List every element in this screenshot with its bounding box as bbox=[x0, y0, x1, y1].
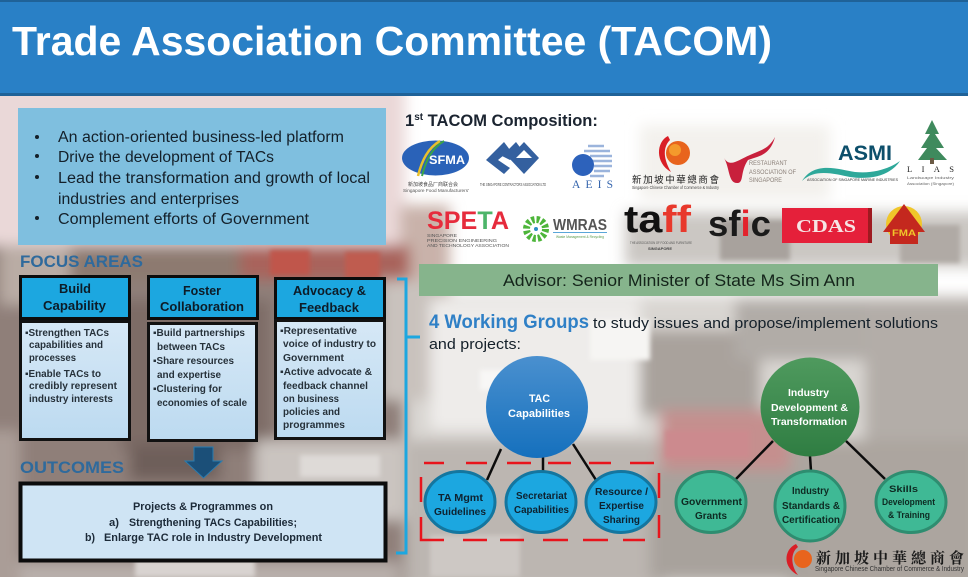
panel: advocacy and feedback: policies and bbox=[283, 407, 340, 418]
panel: build capability: Build bbox=[59, 281, 91, 296]
logo: LIAS bbox=[907, 120, 955, 186]
logo: CDAS: CDAS bbox=[796, 216, 856, 236]
node: skills development and training: Skills bbox=[889, 484, 918, 494]
panel: outcomes: Enlarge TAC role in Industry Development bbox=[104, 532, 322, 544]
text: working groups intro: to study issues and propose/implement solutions bbox=[593, 315, 938, 332]
title banner: Trade Association Committee (TACOM) bbox=[12, 18, 772, 64]
logo: chamber footer bbox=[786, 544, 964, 575]
node: government grants bbox=[676, 472, 746, 532]
panel: advocacy and feedback: voice of industry to bbox=[283, 339, 376, 350]
panel: outcomes: Strengthening TACs Capabilities; bbox=[129, 517, 297, 529]
node: industry development and transformation: Development & bbox=[771, 403, 848, 414]
node: TA management guidelines: TA Mgmt bbox=[438, 493, 484, 504]
panel: advocacy and feedback bbox=[276, 278, 384, 438]
panel: foster collaboration: ▪Build partnerships bbox=[153, 328, 245, 339]
node: secretariat capabilities: Capabilities bbox=[514, 505, 569, 516]
logo: chamber footer: 新加坡中華總商會 bbox=[816, 549, 964, 567]
panel: TACOM description: Drive the development of TACs bbox=[58, 149, 274, 166]
panel: foster collaboration: and expertise bbox=[157, 370, 221, 381]
panel: foster collaboration bbox=[148, 276, 258, 440]
panel: TACOM description: An action-oriented business-led platform bbox=[58, 129, 344, 146]
heading: composition: st bbox=[414, 112, 424, 123]
logo: contractors association bbox=[480, 142, 546, 187]
text: working groups intro bbox=[429, 312, 938, 353]
panel: build capability: industry interests bbox=[29, 394, 113, 405]
panel: build capability: Capability bbox=[43, 298, 107, 313]
logo: sfic: sfic bbox=[708, 203, 771, 244]
panel: foster collaboration: ▪Share resources bbox=[153, 356, 234, 367]
text: working groups intro: and projects: bbox=[429, 336, 521, 353]
node: government grants: Government bbox=[681, 497, 743, 508]
node: industry standards and certification: Standards & bbox=[782, 501, 840, 512]
panel: advocacy and feedback: feedback channel bbox=[283, 381, 368, 392]
logos: member associations bbox=[402, 120, 955, 251]
node: skills development and training: Development bbox=[882, 497, 935, 507]
panel: outcomes: Projects & Programmes on bbox=[133, 501, 273, 513]
node: secretariat capabilities: Secretariat bbox=[516, 491, 568, 502]
node: TAC capabilities: TAC bbox=[529, 393, 550, 405]
advisor bar: Advisor: Senior Minister of State Ms Sim Ann bbox=[503, 272, 855, 290]
panel: build capability: credibly represent bbox=[29, 381, 118, 392]
chart: TAC capabilities working group bbox=[421, 356, 659, 540]
logo: AEIS: AEIS bbox=[572, 179, 613, 191]
heading: outcomes: OUTCOMES bbox=[20, 458, 124, 477]
logo: SPETA: SPETA bbox=[427, 207, 509, 235]
panel: foster collaboration: Collaboration bbox=[160, 299, 244, 314]
logo: Singapore Chinese Chamber: 新加坡中華總商會 bbox=[632, 174, 719, 186]
title banner bbox=[0, 0, 968, 96]
node: TA management guidelines: Guidelines bbox=[434, 507, 486, 518]
panel: build capability: ▪Enable TACs to bbox=[25, 369, 101, 380]
panel: advocacy and feedback: Advocacy & bbox=[293, 283, 366, 298]
red dashed highlight bbox=[421, 463, 659, 540]
node: TAC capabilities: Capabilities bbox=[508, 408, 570, 420]
node: secretariat capabilities bbox=[506, 472, 576, 532]
text: working groups intro: 4 Working Groups bbox=[429, 312, 589, 333]
panel: outcomes: b) bbox=[85, 532, 95, 544]
panel: foster collaboration: ▪Clustering for bbox=[153, 384, 222, 395]
chart: industry development working group bbox=[676, 358, 946, 541]
heading: focus areas: FOCUS AREAS bbox=[20, 252, 143, 271]
panel: build capability: capabilities and bbox=[29, 340, 103, 351]
panel: outcomes bbox=[20, 484, 386, 560]
logo: WMRAS bbox=[526, 217, 607, 239]
logo: Restaurant Association: RESTAURANT bbox=[749, 160, 787, 167]
logo: LIAS: Association (Singapore) bbox=[907, 182, 955, 186]
logo: Singapore Chinese Chamber: Singapore Chinese Chamber of Commerce & Industry bbox=[632, 185, 720, 190]
panel: advocacy and feedback: ▪Representative bbox=[280, 326, 357, 337]
node: government grants: Grants bbox=[695, 511, 727, 522]
panel: advocacy and feedback: Feedback bbox=[299, 300, 360, 315]
panel: build capability bbox=[20, 276, 130, 440]
logo: ASMI: ASMI bbox=[838, 142, 892, 165]
logo: FMAS: FMA bbox=[892, 228, 917, 238]
logo: ASMI bbox=[802, 142, 900, 182]
panel: advocacy and feedback: on business bbox=[283, 394, 339, 405]
panel: advocacy and feedback: ▪Active advocate & bbox=[280, 367, 372, 378]
heading: composition: TACOM Composition: bbox=[423, 112, 598, 130]
logo: SFMA: 新加坡食品厂商联合会 bbox=[408, 181, 458, 188]
panel: foster collaboration: economies of scale bbox=[157, 398, 247, 409]
node: resource and expertise sharing: Resource / bbox=[595, 487, 648, 498]
logo: SFMA bbox=[402, 140, 469, 193]
panel: foster collaboration: Foster bbox=[183, 283, 221, 298]
panel: TACOM description: Lead the transformation and growth of local bbox=[58, 170, 370, 187]
advisor bar bbox=[419, 264, 938, 296]
panel: build capability: ▪Strengthen TACs bbox=[25, 328, 109, 339]
node: TA management guidelines bbox=[425, 472, 495, 532]
logo: SPETA bbox=[427, 207, 509, 248]
logo: FMAS bbox=[883, 204, 925, 244]
node: industry standards and certification: Industry bbox=[792, 486, 829, 497]
logo: contractors association: THE SINGAPORE CONTRACTORS ASSOCIATION LTD bbox=[480, 182, 546, 187]
panel: TACOM description: Complement efforts of Government bbox=[58, 211, 310, 228]
bracket linking left panels to working groups bbox=[396, 279, 420, 553]
node: skills development and training: & Training bbox=[888, 510, 930, 520]
logo: Singapore Chinese Chamber bbox=[632, 136, 720, 190]
node: industry standards and certification bbox=[775, 471, 845, 541]
logo: Restaurant Association bbox=[724, 137, 796, 184]
heading: composition: 1 bbox=[405, 112, 414, 130]
node: industry development and transformation: Industry bbox=[788, 388, 829, 399]
logo: SPETA: SINGAPORE bbox=[427, 233, 457, 238]
logo: taff: THE ASSOCIATION OF FOOD AND FURNITURE bbox=[630, 241, 692, 245]
logo: LIAS: Landscape Industry bbox=[907, 176, 954, 180]
node: TAC capabilities bbox=[486, 356, 588, 458]
logo: taff: SINGAPORE bbox=[648, 247, 672, 251]
panel: outcomes: a) bbox=[109, 517, 119, 529]
panel: TACOM description bbox=[18, 108, 386, 245]
panel: build capability: processes bbox=[29, 353, 76, 364]
logo: taff: taff bbox=[624, 199, 691, 241]
logo: LIAS: LIAS bbox=[907, 164, 954, 174]
logo: WMRAS: Waste Management & Recycling bbox=[556, 234, 604, 239]
logo: WMRAS: WMRAS bbox=[553, 217, 607, 234]
node: industry standards and certification: Certification bbox=[782, 515, 840, 526]
logo: Restaurant Association: ASSOCIATION OF bbox=[749, 169, 796, 176]
panel: TACOM description: industries and enterprises bbox=[58, 191, 239, 208]
node: industry development and transformation: Transformation bbox=[771, 417, 847, 428]
panel: foster collaboration: between TACs bbox=[157, 342, 225, 353]
node: industry development and transformation bbox=[760, 358, 860, 456]
logo: AEIS bbox=[572, 146, 613, 191]
logo: SPETA: AND TECHNOLOGY ASSOCIATION bbox=[427, 243, 509, 248]
logo: SPETA: PRECISION ENGINEERING bbox=[427, 238, 497, 243]
logo: SFMA: Singapore Food Manufacturers' bbox=[403, 188, 469, 193]
logo: SFMA: SFMA bbox=[429, 153, 465, 167]
node: resource and expertise sharing bbox=[586, 472, 656, 532]
panel: advocacy and feedback: Government bbox=[283, 353, 345, 364]
logo: ASMI: ASSOCIATION OF SINGAPORE MARINE INDUSTRIES bbox=[807, 178, 898, 182]
arrow: focus areas to outcomes bbox=[185, 447, 222, 478]
logo: Restaurant Association: SINGAPORE bbox=[749, 177, 783, 184]
node: resource and expertise sharing: Sharing bbox=[603, 515, 640, 526]
node: skills development and training bbox=[876, 472, 946, 532]
node: resource and expertise sharing: Expertise bbox=[599, 501, 644, 512]
logo: CDAS bbox=[782, 208, 872, 243]
panel: advocacy and feedback: programmes bbox=[283, 420, 345, 431]
